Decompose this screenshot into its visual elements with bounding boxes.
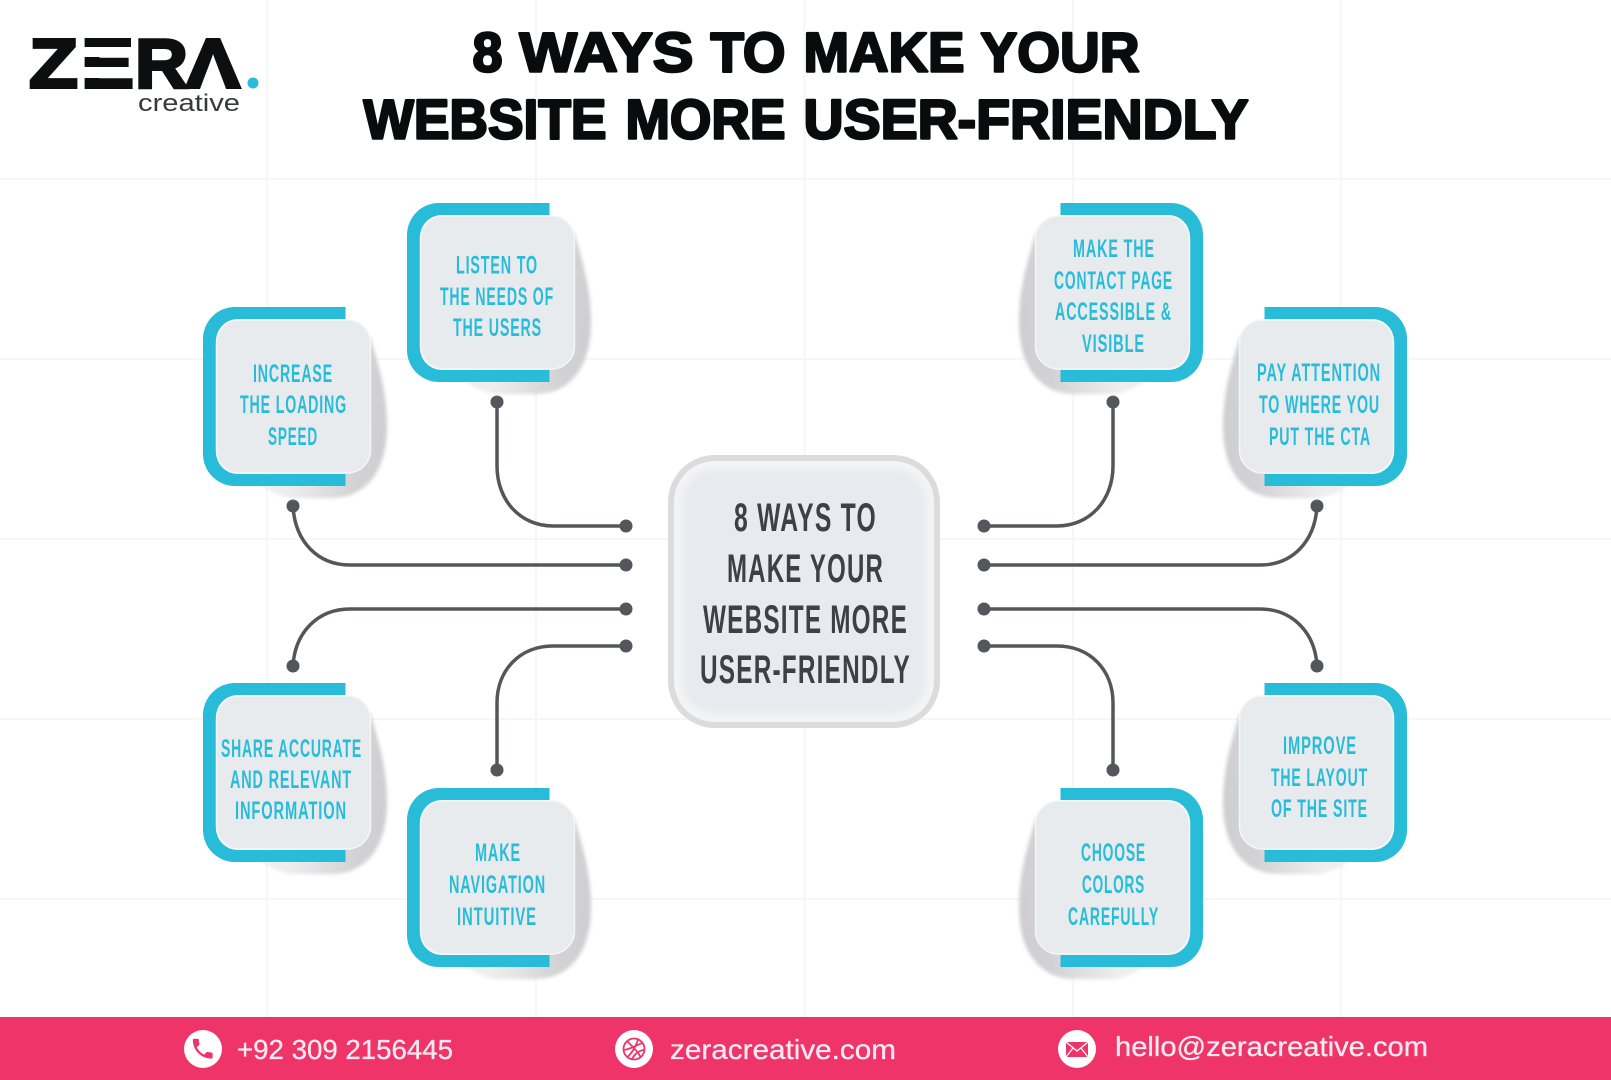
card: make navigation intuitive — [407, 788, 591, 979]
card: make the contact page accessible and visible: CONTACT PAGE — [1054, 267, 1173, 295]
card: improve the layout of the site — [1223, 683, 1407, 874]
card: increase the loading speed: THE LOADING — [240, 391, 347, 419]
card: improve the layout of the site: IMPROVE — [1283, 732, 1357, 760]
connector: improve the layout of the site — [978, 602, 1324, 672]
card: listen to the needs of the users: THE USERS — [453, 314, 542, 342]
card: improve the layout of the site: OF THE SITE — [1271, 795, 1368, 823]
logo: Zera creative — [29, 24, 258, 117]
icon: phone — [184, 1030, 222, 1068]
card: share accurate and relevant information: SHARE ACCURATE — [221, 735, 362, 763]
card: make the contact page accessible and visible: ACCESSIBLE & — [1055, 298, 1172, 326]
card: choose colors carefully: COLORS — [1082, 871, 1145, 899]
card: listen to the needs of the users: THE NEEDS OF — [440, 283, 554, 311]
title: TO — [710, 20, 786, 84]
title: USER-FRIENDLY — [804, 88, 1248, 150]
card: pay attention to where you put the CTA — [1223, 307, 1407, 498]
card: pay attention to where you put the CTA: PUT THE CTA — [1269, 423, 1371, 451]
card: listen to the needs of the users — [407, 203, 591, 394]
footer bar — [0, 1017, 1611, 1080]
email address: hello@zeracreative.com — [1115, 1031, 1428, 1062]
card: listen to the needs of the users: LISTEN TO — [456, 252, 538, 280]
card: increase the loading speed: INCREASE — [253, 360, 333, 388]
logo: Zera creative: creative — [138, 90, 240, 117]
card: improve the layout of the site: THE LAYOUT — [1271, 764, 1368, 792]
panel: center hub: WEBSITE MORE — [703, 598, 908, 642]
panel: center hub: 8 WAYS TO — [734, 496, 877, 540]
card: choose colors carefully: CAREFULLY — [1068, 903, 1159, 931]
connector: make navigation intuitive — [490, 640, 632, 776]
connector: pay attention to where you put the CTA — [978, 500, 1324, 572]
card: increase the loading speed: SPEED — [268, 423, 318, 451]
icon: email — [1058, 1030, 1096, 1068]
logo: Zera creative: R — [135, 24, 188, 102]
card: share accurate and relevant information: INFORMATION — [235, 797, 347, 825]
card: make navigation intuitive: INTUITIVE — [457, 903, 537, 931]
card: make the contact page accessible and visible — [1019, 203, 1203, 394]
card: make the contact page accessible and visible: VISIBLE — [1082, 330, 1145, 358]
title: MAKE — [804, 20, 964, 84]
card: pay attention to where you put the CTA: PAY ATTENTION — [1257, 359, 1381, 387]
card: share accurate and relevant information: AND RELEVANT — [230, 766, 352, 794]
title — [364, 20, 1248, 150]
website address: zeracreative.com — [670, 1034, 896, 1065]
card: make navigation intuitive: MAKE — [475, 839, 521, 867]
connector: make the contact page accessible and visible — [978, 396, 1120, 532]
card: make the contact page accessible and visible: MAKE THE — [1073, 235, 1155, 263]
card: choose colors carefully — [1019, 788, 1203, 979]
card: increase the loading speed — [203, 307, 387, 498]
logo: Zera creative: Λ — [186, 24, 240, 102]
card: choose colors carefully: CHOOSE — [1081, 839, 1146, 867]
logo: Zera creative: Z — [29, 24, 78, 102]
connector: listen to the needs of the users — [490, 396, 632, 532]
card: make navigation intuitive: NAVIGATION — [449, 871, 546, 899]
connector: choose colors carefully — [978, 640, 1120, 776]
card: pay attention to where you put the CTA: TO WHERE YOU — [1259, 391, 1380, 419]
phone number: +92 309 2156445 — [237, 1034, 453, 1065]
panel: center hub: MAKE YOUR — [727, 547, 884, 591]
connector: share accurate and relevant information — [286, 602, 632, 672]
icon: website — [615, 1030, 653, 1068]
connector: increase the loading speed — [286, 500, 632, 572]
card: share accurate and relevant information — [203, 683, 387, 874]
title: WAYS — [520, 20, 694, 84]
panel: center hub — [671, 458, 937, 725]
title: MORE — [626, 88, 786, 150]
logo: Zera creative: E — [81, 24, 134, 102]
panel: center hub: USER-FRIENDLY — [700, 648, 911, 692]
title: YOUR — [980, 20, 1140, 84]
title: WEBSITE — [364, 88, 606, 150]
title: 8 — [472, 20, 502, 84]
